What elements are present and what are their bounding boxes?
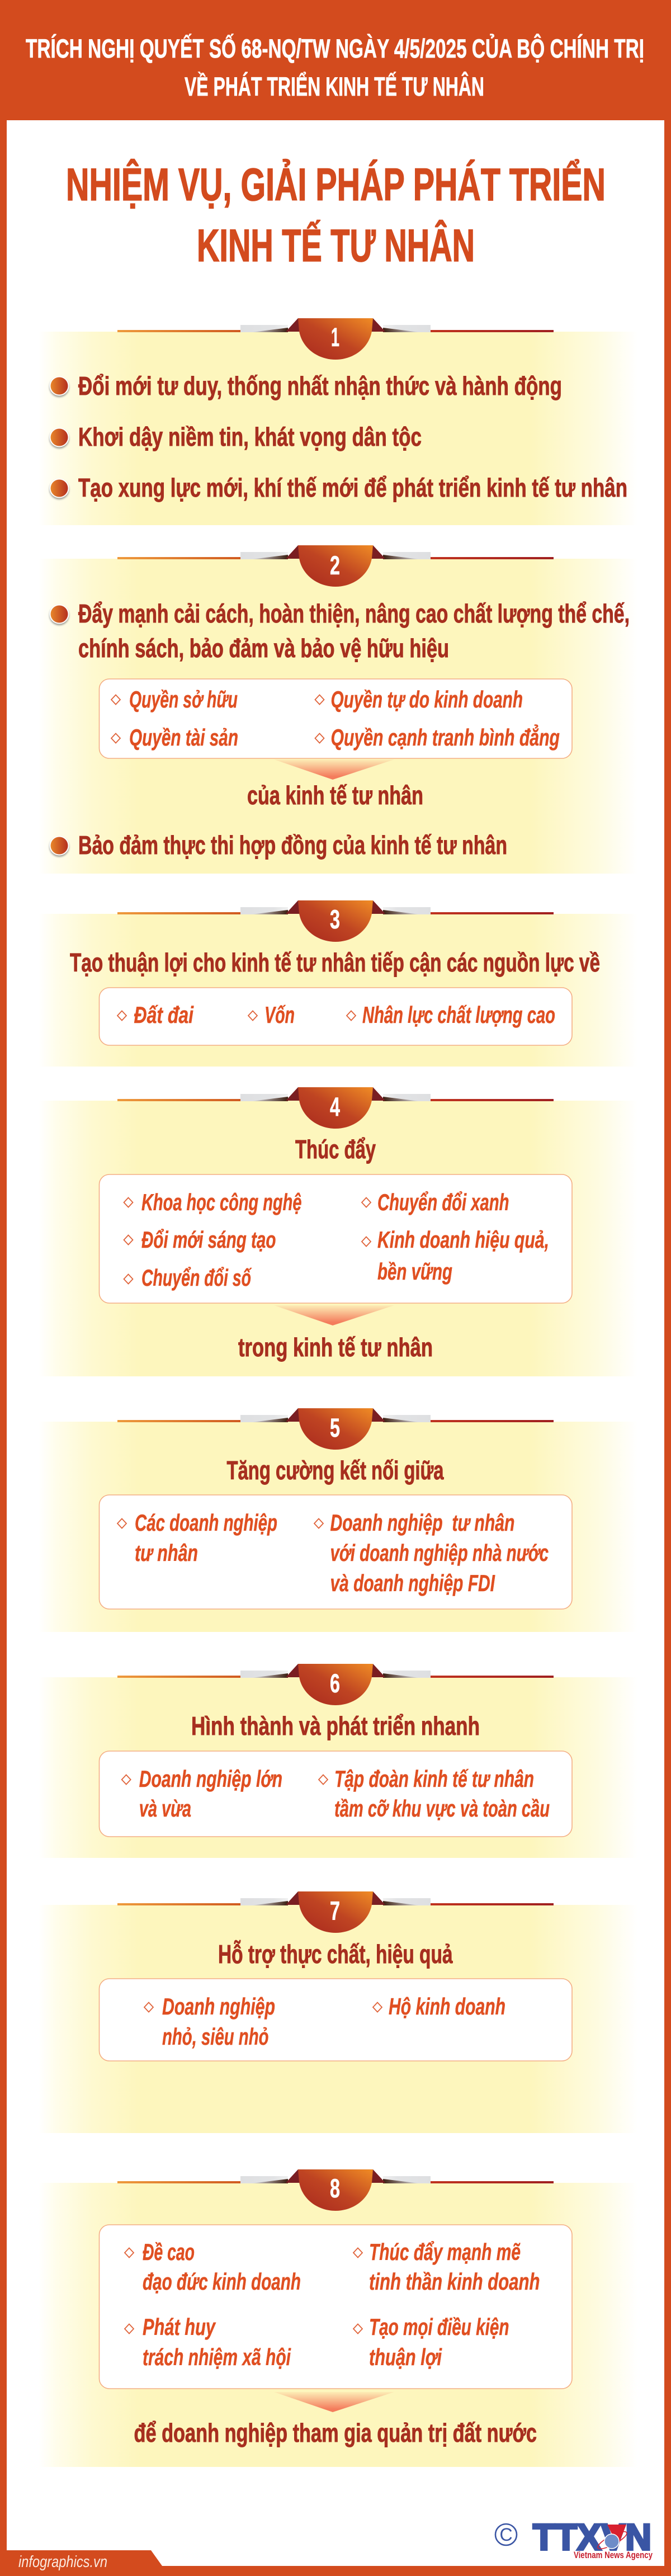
box: thúc đẩy: Khoa học công nghệ [141, 1189, 302, 1215]
number badge 1: 1 [331, 322, 339, 352]
panel: section 3 [39, 900, 637, 1067]
panel: section 6 [39, 1664, 637, 1858]
box: hỗ trợ: Doanh nghiệp [162, 1993, 275, 2020]
box: đề cao: đạo đức kinh doanh [143, 2268, 301, 2295]
box: doanh nghiệp [100, 1751, 572, 1837]
number badge 5: 5 [330, 1413, 340, 1442]
number badge 6 [117, 1664, 554, 1705]
box: kết nối: Doanh nghiệp tư nhân [330, 1509, 514, 1536]
number badge 3: 3 [330, 904, 340, 934]
box: thúc đẩy: Chuyển đổi số [141, 1265, 252, 1291]
box: đề cao: thuận lợi [369, 2344, 442, 2370]
panel: section 1 [39, 318, 637, 525]
number badge 7: 7 [330, 1896, 340, 1926]
box: kết nối: tư nhân [135, 1540, 198, 1566]
box: nguồn lực: Vốn [264, 1002, 295, 1028]
box: nguồn lực: Đất đai [134, 1002, 194, 1028]
footer tab: infographics.vn: infographics.vn [18, 2553, 107, 2571]
box: doanh nghiệp: và vừa [139, 1795, 191, 1822]
number badge 4 [117, 1087, 554, 1129]
bullet: bảo đảm thực thi hợp đồng: Bảo đảm thực thi hợp đồng của kinh tế tư nhân [78, 831, 507, 860]
box: đề cao: Đề cao [143, 2239, 195, 2265]
title: KINH TẾ TƯ NHÂN [197, 220, 475, 271]
box: doanh nghiệp: Doanh nghiệp lớn [139, 1766, 282, 1792]
box: hỗ trợ: Hộ kinh doanh [389, 1993, 505, 2020]
box: thúc đẩy: Chuyển đổi xanh [377, 1189, 509, 1215]
panel: section 7 [39, 1891, 637, 2133]
footer tab: infographics.vn [0, 2550, 162, 2571]
box: các quyền: Quyền cạnh tranh bình đẳng [331, 724, 560, 751]
number badge 7 [117, 1891, 554, 1933]
logo: TTXVN: C [499, 2525, 513, 2545]
heading: Hình thành và phát triển nhanh [191, 1711, 480, 1740]
box: đề cao: Thúc đẩy mạnh mẽ [369, 2239, 521, 2265]
box: kết nối [100, 1495, 572, 1609]
number badge 6: 6 [330, 1668, 340, 1698]
heading: Tăng cường kết nối giữa [227, 1456, 444, 1485]
number badge 8 [117, 2169, 554, 2211]
box: nguồn lực: Nhân lực chất lượng cao [362, 1002, 555, 1028]
box: các quyền [100, 679, 572, 758]
title [66, 159, 606, 271]
heading: Hỗ trợ thực chất, hiệu quả [218, 1940, 453, 1969]
box: đề cao: trách nhiệm xã hội [143, 2344, 291, 2370]
box: nguồn lực [100, 988, 572, 1045]
box: đề cao: Tạo mọi điều kiện [369, 2314, 509, 2340]
panel: section 4 [39, 1087, 637, 1376]
box: đề cao [100, 2225, 572, 2389]
box: các quyền: Quyền tài sản [129, 724, 238, 751]
box: kết nối: với doanh nghiệp nhà nước [330, 1540, 549, 1566]
box: đề cao: tinh thần kinh doanh [369, 2268, 540, 2295]
box: kết nối: Các doanh nghiệp [135, 1509, 277, 1536]
arrow [274, 759, 394, 780]
box: hỗ trợ [100, 1979, 572, 2061]
number badge 5 [117, 1408, 554, 1450]
box: thúc đẩy [100, 1174, 572, 1303]
box: hỗ trợ: nhỏ, siêu nhỏ [162, 2023, 268, 2050]
text: của kinh tế tư nhân: của kinh tế tư nhân [247, 781, 423, 810]
bullet: khơi dậy niềm tin: Khơi dậy niềm tin, khát vọng dân tộc [78, 422, 422, 451]
panel: section 2 [39, 545, 637, 874]
box: doanh nghiệp: tầm cỡ khu vực và toàn cầu [334, 1795, 550, 1822]
text: trong kinh tế tư nhân: trong kinh tế tư nhân [238, 1333, 433, 1362]
number badge 2: 2 [330, 550, 340, 580]
arrow [274, 1305, 394, 1325]
arrow [274, 2392, 394, 2412]
box: thúc đẩy: Kinh doanh hiệu quả, [377, 1226, 549, 1253]
box: thúc đẩy: bền vững [377, 1258, 452, 1285]
heading: Thúc đẩy [295, 1135, 376, 1164]
header banner [26, 34, 644, 101]
box: đề cao: Phát huy [143, 2314, 216, 2340]
logo: TTXVN: TTXVN [533, 2516, 651, 2558]
panel: section 5 [39, 1408, 637, 1632]
box: doanh nghiệp: Tập đoàn kinh tế tư nhân [334, 1766, 534, 1792]
box: kết nối: và doanh nghiệp FDI [330, 1570, 495, 1596]
header banner: VỀ PHÁT TRIỂN KINH TẾ TƯ NHÂN [185, 72, 484, 101]
text: để doanh nghiệp tham gia quản trị đất nước: để doanh nghiệp tham gia quản trị đất nước [134, 2418, 537, 2447]
bullet: đẩy mạnh cải cách [49, 599, 630, 663]
box: các quyền: Quyền tự do kinh doanh [331, 686, 523, 713]
panel: section 8 [39, 2169, 637, 2467]
box: các quyền: Quyền sở hữu [129, 686, 238, 713]
bullet: đẩy mạnh cải cách: chính sách, bảo đảm và bảo vệ hữu hiệu [78, 634, 449, 663]
number badge 1 [117, 318, 554, 360]
number badge 2 [117, 545, 554, 587]
number badge 8: 8 [330, 2173, 340, 2203]
number badge 3 [117, 900, 554, 942]
number badge 4: 4 [330, 1092, 340, 1121]
box: thúc đẩy: Đổi mới sáng tạo [141, 1226, 276, 1253]
